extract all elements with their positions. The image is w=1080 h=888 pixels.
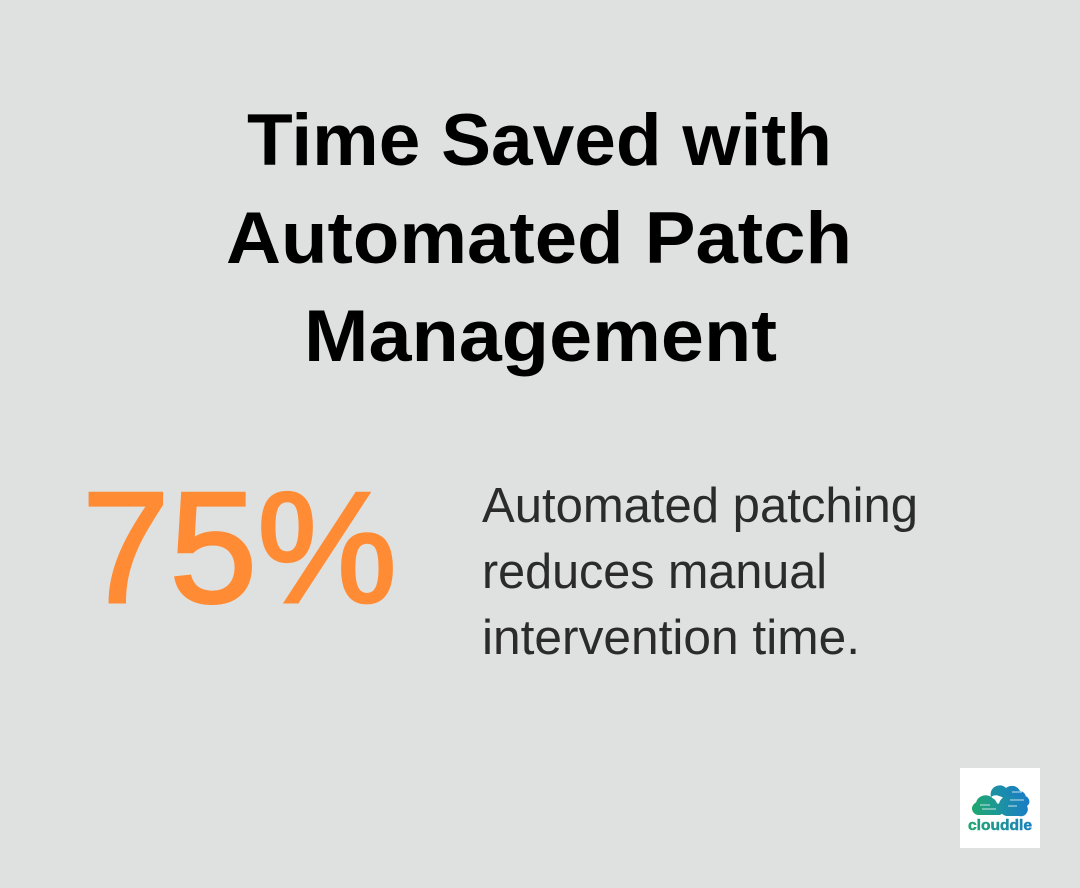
statistic description: Automated patching <box>482 479 918 533</box>
statistic description <box>482 479 918 665</box>
title: Management <box>304 296 777 377</box>
statistic description: intervention time. <box>482 611 860 665</box>
title: Time Saved with <box>247 100 832 181</box>
icon: clouds <box>972 785 1029 816</box>
title: Automated Patch <box>226 198 852 279</box>
logo: clouddle <box>960 768 1040 848</box>
logo wordmark: clouddle <box>968 817 1032 834</box>
statistic description: reduces manual <box>482 545 827 599</box>
title <box>226 100 852 377</box>
statistic: 75%: 75% <box>82 460 397 636</box>
